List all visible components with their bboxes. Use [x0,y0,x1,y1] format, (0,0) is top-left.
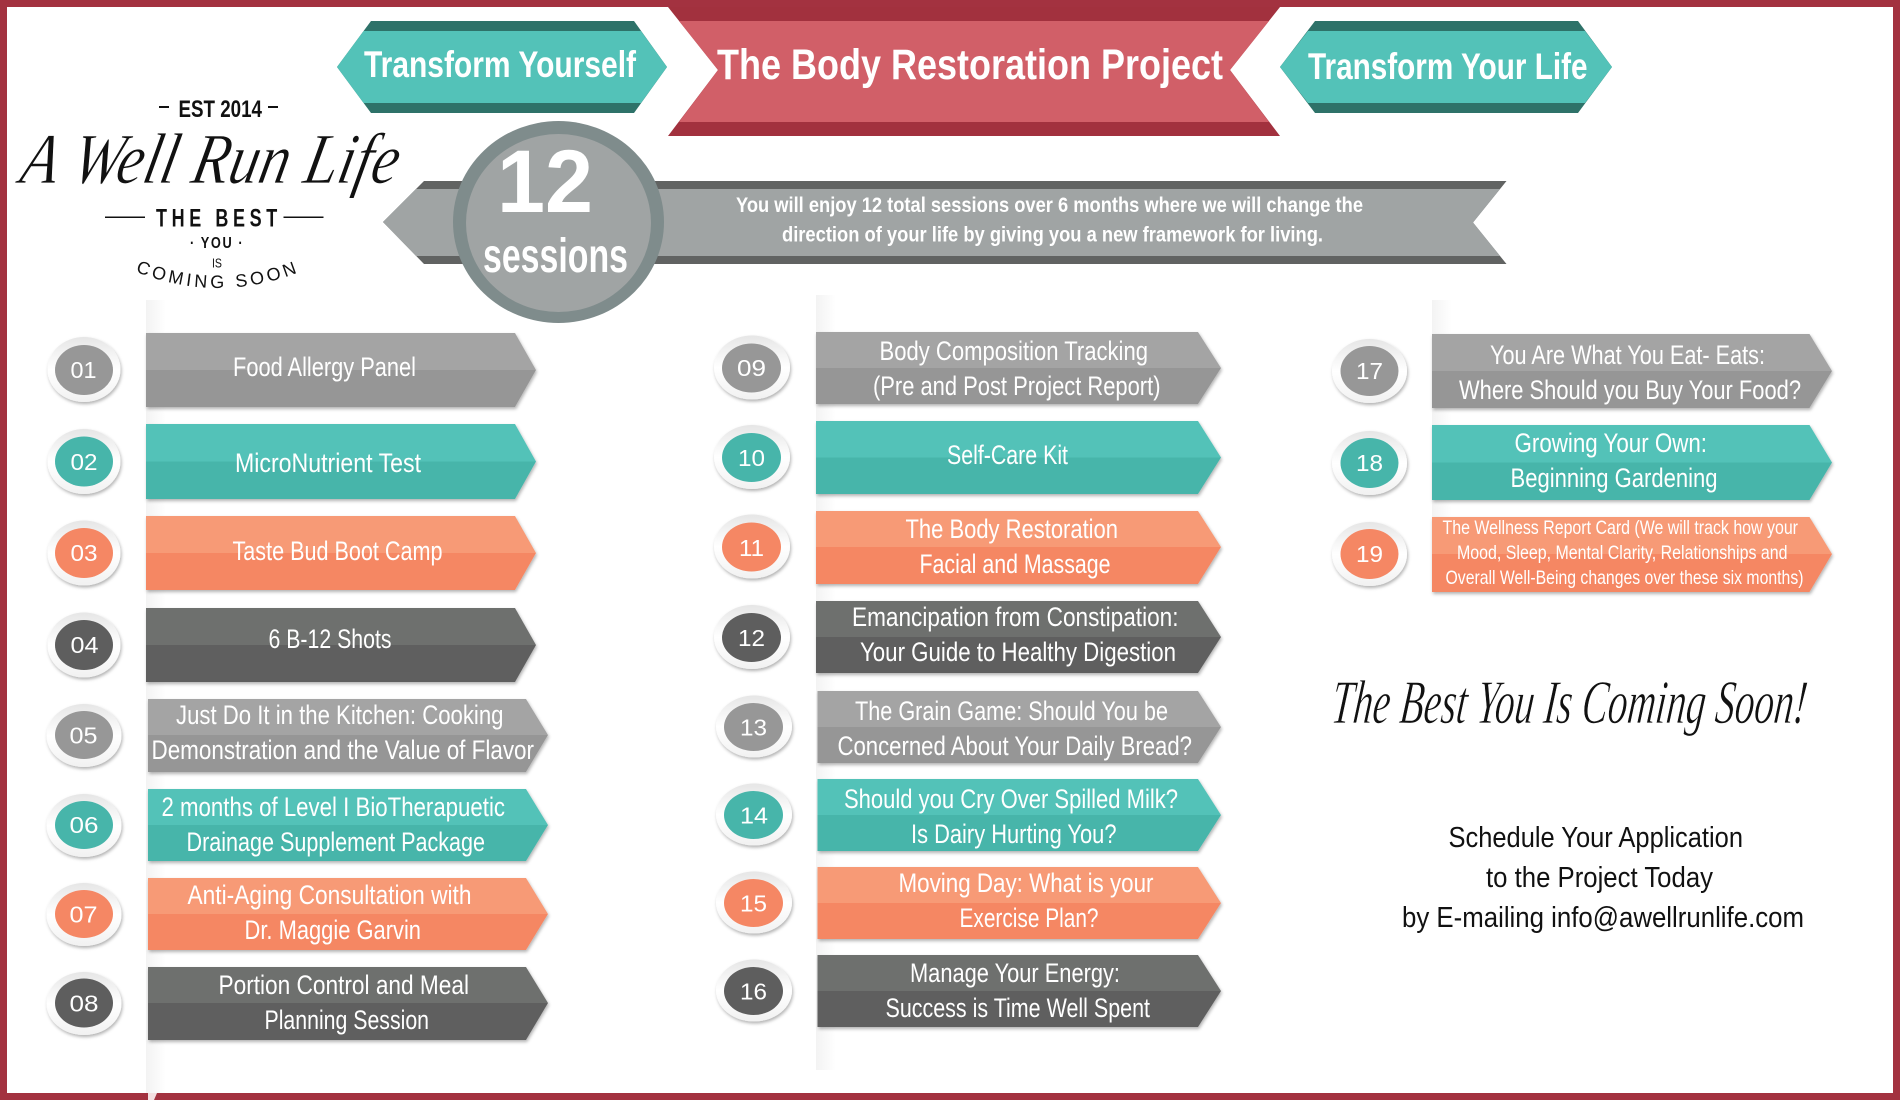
bar 02 [146,424,536,499]
item 02 [48,424,536,499]
bar 04 [146,608,536,682]
bar 07 [148,878,548,950]
bar 12 [816,601,1221,673]
item 06 [46,789,548,861]
bar 03: Taste Bud Boot Camp [232,536,442,566]
bar 10 [816,421,1221,494]
bar 05: Just Do It in the Kitchen: Cooking [176,700,504,730]
bar 19: Mood, Sleep, Mental Clarity, Relationships and [1457,542,1788,564]
badge 15 [716,872,792,934]
badge 16: 16 [740,978,767,1004]
badge: 12 sessions: 12 [497,131,593,231]
badge 02: 02 [70,449,98,475]
badge 15: 15 [740,890,767,916]
badge 06: 06 [70,812,98,838]
logo est line: EST 2014 [178,96,263,123]
bar 16: Success is Time Well Spent [886,993,1150,1023]
bar 06: 2 months of Level I BioTherapuetic [162,792,505,822]
badge 04: 04 [70,632,99,658]
bar 01 [146,333,536,407]
item 17 [1332,334,1832,408]
bar 18: Growing Your Own: [1514,428,1707,458]
bar 05 [148,699,548,772]
badge 18 [1332,431,1407,495]
bar 09 [816,332,1221,404]
bar 15: Exercise Plan? [960,903,1098,933]
item 15 [716,867,1221,939]
badge 13: 13 [740,714,767,740]
item 10 [714,421,1221,494]
badge 02 [48,429,120,494]
bar 02: MicroNutrient Test [235,448,421,478]
bar 12: Your Guide to Healthy Digestion [860,637,1176,667]
item 04 [48,608,536,682]
bar 11 [816,511,1221,584]
item 16 [716,955,1221,1027]
logo is: IS [212,256,222,270]
badge 17 [1332,339,1407,403]
item 11 [714,511,1221,584]
bar 17 [1432,334,1832,408]
badge 10: 10 [738,445,765,471]
badge 14 [716,784,792,846]
badge 16 [716,960,792,1022]
bar 05: Demonstration and the Value of Flavor [152,735,534,765]
badge: 12 sessions: sessions [483,230,628,283]
bar 19 [1432,517,1832,592]
badge: 12 sessions [453,121,664,323]
bar 09: (Pre and Post Project Report) [873,371,1160,401]
item 18 [1332,425,1832,500]
badge 17: 17 [1356,358,1383,384]
banner: The Body Restoration Project [668,7,1280,136]
bar 09: Body Composition Tracking [880,336,1148,366]
banner: Transform Your Life [1280,21,1612,113]
badge 13 [716,696,792,758]
bar 03 [146,516,536,590]
bar 14 [818,779,1221,851]
logo you: · YOU · [190,235,244,252]
item 14 [716,779,1221,851]
banner: Transform Your Life: Transform Your Life [1308,46,1588,87]
call to action text: by E-mailing info@awellrunlife.com [1402,902,1804,934]
item 07 [46,878,548,950]
bar 08 [148,967,548,1040]
banner: The Body Restoration Project: The Body Restoration Project [717,41,1223,89]
bar 06 [148,789,548,861]
column shadow strips [146,295,1452,1100]
item 19 [1332,517,1832,592]
bar 17: Where Should you Buy Your Food? [1459,375,1801,405]
bar 18 [1432,425,1832,500]
ribbon text [736,194,1363,246]
call to action text: Schedule Your Application [1448,822,1743,854]
ribbon: 12 sessions description [383,181,1506,264]
bar 17: You Are What You Eat- Eats: [1490,340,1765,370]
badge 08 [46,972,122,1035]
bar 10: Self-Care Kit [947,440,1068,470]
bar 15: Moving Day: What is your [898,868,1154,898]
badge 12: 12 [738,625,765,651]
item 08 [46,967,548,1040]
ribbon text: direction of your life by giving you a new framework for living. [782,224,1323,246]
bar 06: Drainage Supplement Package [186,827,485,857]
item 05 [46,699,548,772]
item 13 [716,691,1221,763]
bar 15 [818,867,1221,939]
badge 08: 08 [70,990,98,1016]
call to action text [1402,822,1804,934]
badge 01 [48,337,120,402]
logo coming soon: COMING SOON [138,262,296,288]
badge 05: 05 [70,722,98,748]
bar 19: The Wellness Report Card (We will track how your [1442,517,1798,539]
bar 16 [818,955,1221,1027]
bar 12: Emancipation from Constipation: [852,602,1178,632]
bar 14: Should you Cry Over Spilled Milk? [844,784,1178,814]
banner: Transform Yourself: Transform Yourself [364,44,637,85]
bar 04: 6 B-12 Shots [268,624,392,654]
badge 10 [714,425,790,489]
badge 04 [48,612,120,678]
badge 07: 07 [70,902,98,928]
bar 08: Portion Control and Meal [218,970,469,1000]
badge 19 [1332,522,1407,586]
bar 16: Manage Your Energy: [910,958,1120,988]
badge 14: 14 [740,802,768,828]
bar 13: Concerned About Your Daily Bread? [838,731,1192,761]
badge 01: 01 [70,357,96,383]
bar 14: Is Dairy Hurting You? [911,819,1116,849]
badge 18: 18 [1356,450,1383,476]
item 12 [714,601,1221,673]
badge 11 [714,514,790,578]
item 09 [714,332,1221,404]
logo: A Well Run Life [11,96,409,288]
badge 19: 19 [1356,541,1383,567]
bar 13 [818,691,1221,763]
bar 13: The Grain Game: Should You be [855,696,1168,726]
bar 19: Overall Well-Being changes over these six months) [1446,567,1804,589]
banner: Transform Yourself [337,21,667,113]
bar 08: Planning Session [264,1005,429,1035]
badge 07 [46,883,122,946]
badge 06 [46,794,122,857]
badge 09 [714,336,790,400]
item 03 [48,516,536,590]
badge 03: 03 [70,540,98,566]
logo script name: A Well Run Life [11,119,409,199]
badge 03 [48,520,120,586]
bar 07: Anti-Aging Consultation with [188,880,472,910]
call to action text: to the Project Today [1486,862,1713,894]
bar 18: Beginning Gardening [1510,463,1718,493]
badge 05 [46,704,122,767]
bar 07: Dr. Maggie Garvin [244,915,421,945]
badge 11: 11 [739,535,764,561]
bar 11: The Body Restoration [906,514,1118,544]
item 01 [48,333,536,407]
ribbon text: You will enjoy 12 total sessions over 6 months where we will change the [736,194,1363,217]
bar 01: Food Allergy Panel [233,352,416,382]
bar 11: Facial and Massage [920,549,1110,579]
badge 09: 09 [737,355,766,381]
logo the best line: THE BEST [156,204,282,232]
badge 12 [714,605,790,669]
